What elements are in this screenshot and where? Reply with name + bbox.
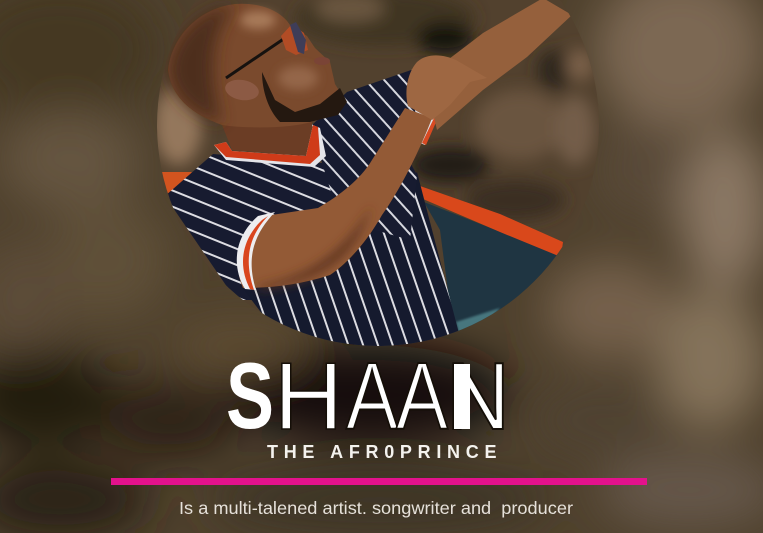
neck bbox=[222, 122, 312, 156]
A: A bbox=[396, 343, 448, 450]
circular portrait photo bbox=[150, 0, 610, 360]
pink divider bbox=[111, 478, 647, 485]
lips bbox=[314, 57, 330, 65]
N: N bbox=[446, 343, 510, 450]
car roof edge bbox=[420, 186, 563, 257]
N thick stem bbox=[454, 364, 470, 429]
sunglasses temple arm bbox=[226, 38, 285, 78]
arm sleeve hem bbox=[237, 212, 275, 290]
collar bbox=[214, 125, 326, 167]
shirt chest bbox=[312, 70, 417, 238]
shirt body lower bbox=[240, 172, 462, 350]
car roof left bbox=[160, 172, 192, 198]
sleeve hem bbox=[415, 110, 434, 145]
title: SHAAN bbox=[226, 343, 510, 450]
beard bbox=[262, 72, 347, 122]
skull shadow bbox=[168, 4, 235, 124]
forehead highlight bbox=[240, 11, 276, 29]
front arm bbox=[238, 108, 432, 288]
lit cheek bbox=[278, 66, 318, 90]
tagline: Is a multi-talened artist. songwriter and producer bbox=[179, 498, 573, 518]
shirt bbox=[165, 68, 462, 350]
subtitle: THE AFR0PRINCE bbox=[267, 442, 502, 462]
car window bbox=[425, 202, 558, 332]
A: A bbox=[346, 343, 398, 450]
skull and face bbox=[168, 4, 345, 127]
photo backdrop: dry bush bbox=[157, 0, 598, 222]
ear bbox=[225, 80, 259, 100]
car window highlight bbox=[456, 308, 500, 331]
fist bbox=[406, 55, 487, 120]
sunglasses lens bbox=[281, 24, 308, 55]
H: H bbox=[274, 343, 343, 450]
raised forearm bbox=[430, 0, 572, 130]
S: S bbox=[226, 343, 274, 448]
arm shadow bbox=[258, 205, 372, 290]
shirt body left bbox=[165, 154, 340, 300]
head bbox=[168, 4, 347, 127]
